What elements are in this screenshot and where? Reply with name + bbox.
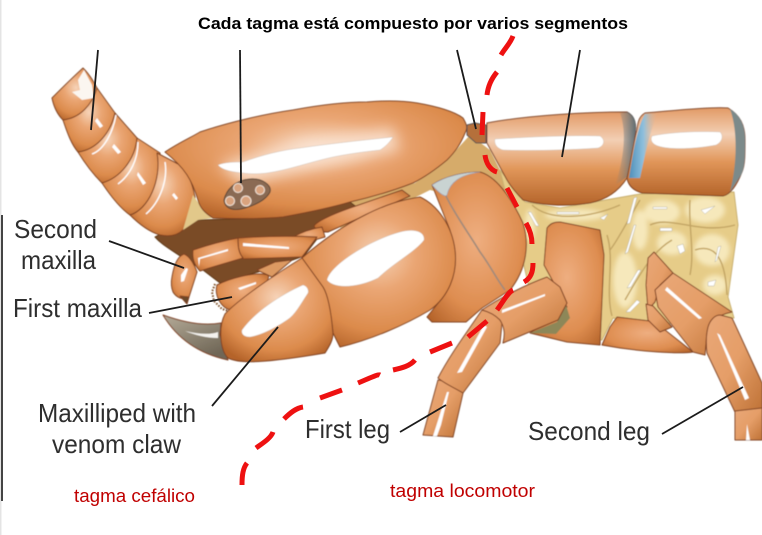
second tergite: [627, 108, 745, 196]
first tergite: [487, 112, 636, 205]
tan tissue behind head: [340, 135, 510, 228]
title: Cada tagma está compuesto por varios segmentos: [198, 15, 628, 33]
red dashed tagma boundary: [242, 36, 533, 485]
first tergite grey edge: [615, 112, 636, 185]
tip highlight: [242, 285, 308, 337]
antenna: [52, 68, 195, 236]
sternite: [530, 222, 604, 345]
membrane cells: [525, 197, 730, 308]
label: second maxilla, line two: maxilla: [21, 245, 96, 275]
label: first maxilla: First maxilla: [13, 293, 143, 323]
small segment behind maxilliped: [257, 260, 292, 277]
second maxilla: [171, 190, 410, 299]
second tergite highlight: [651, 132, 722, 149]
first tergite highlight: [495, 136, 604, 150]
yellow gap under antenna: [183, 195, 213, 230]
yellow membrane: [500, 170, 738, 340]
leader lines: [91, 50, 743, 434]
second leg: [646, 252, 762, 440]
maxilliped femur: [302, 197, 456, 347]
antenna white cut at tip: [72, 70, 94, 100]
label: venom claw: venom claw: [52, 429, 181, 459]
label: second leg: Second leg: [528, 416, 650, 446]
membrane folds: [532, 200, 735, 316]
first leg: [423, 277, 567, 437]
femur highlight: [327, 230, 424, 286]
second maxilla highlights: [181, 243, 289, 282]
label: tagma cefálico: tagma cefálico: [74, 486, 195, 506]
first maxilla with bristles: [212, 274, 268, 312]
centipede anatomical illustration: [52, 68, 762, 440]
label: first leg: First leg: [305, 414, 390, 444]
pleurite grey highlight: [432, 172, 480, 196]
spiracle plate: [467, 123, 486, 143]
head highlight: [218, 137, 393, 174]
antenna ring highlights and glints: [92, 115, 178, 214]
maxilla tip: [180, 296, 189, 304]
pleurite: [427, 172, 526, 322]
membrane highlights: [528, 197, 721, 312]
left margin rule: [0, 0, 3, 535]
head pale glow: [218, 128, 400, 185]
dark head underside band: [155, 202, 358, 283]
maxilliped tip segment: [221, 258, 333, 362]
label: second maxilla: Second: [14, 214, 97, 244]
second tergite grey edge: [730, 109, 745, 192]
first leg highlights: [433, 294, 545, 436]
shade under coxa: [530, 305, 570, 334]
label: tagma locomotor: tagma locomotor: [390, 481, 535, 501]
venom claw: [163, 315, 228, 360]
posterior sternite: [602, 317, 693, 353]
head capsule: [165, 101, 467, 219]
second tergite blue edge: [629, 113, 658, 178]
second leg highlights: [665, 287, 750, 440]
label: maxilliped: Maxilliped with: [38, 398, 196, 428]
eye cluster: [224, 179, 270, 209]
pleurite groove: [446, 196, 505, 290]
anatomical labels: [13, 214, 650, 459]
